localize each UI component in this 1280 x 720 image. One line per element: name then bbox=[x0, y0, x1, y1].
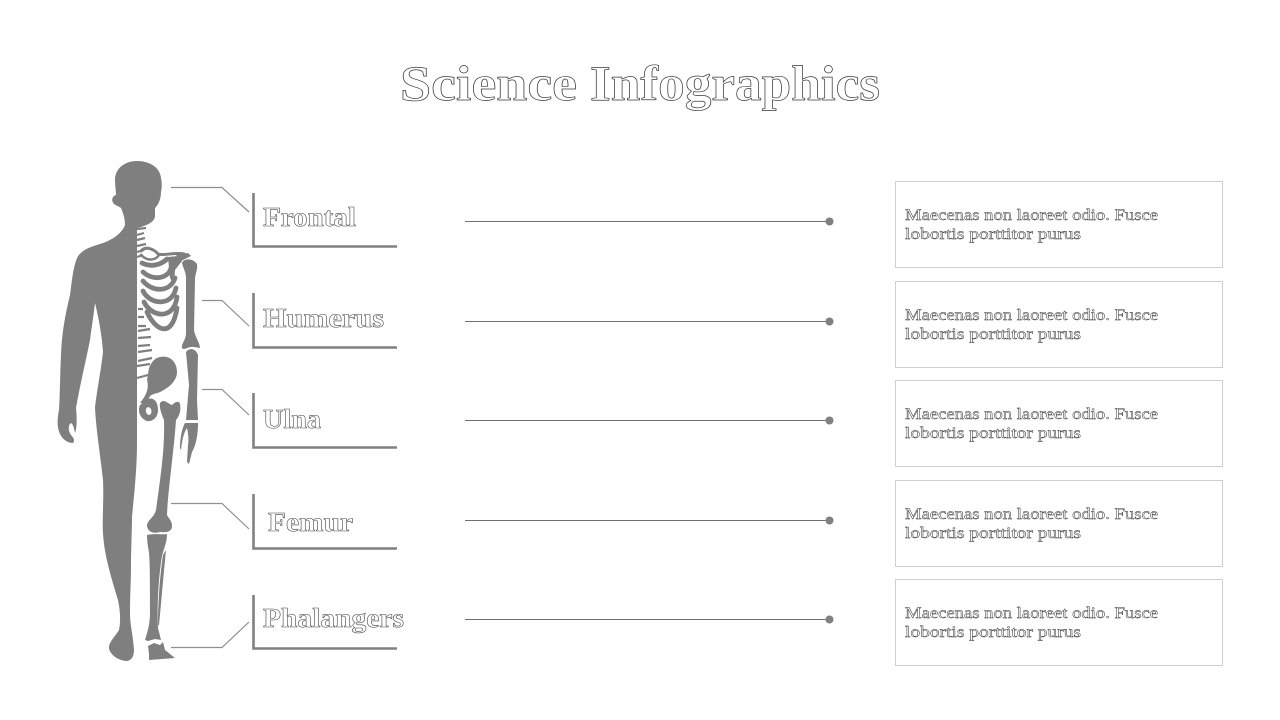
title bbox=[400, 55, 880, 111]
label: Phalangers bbox=[263, 603, 404, 633]
description box bbox=[896, 282, 1222, 368]
row 2: Humerus bbox=[202, 282, 1222, 368]
label bracket bbox=[254, 494, 397, 548]
femur bbox=[147, 401, 180, 533]
connector with dot bbox=[465, 516, 834, 524]
label bracket bbox=[254, 293, 397, 348]
description box: Maecenas non laoreet odio. Fusce bbox=[905, 307, 1158, 324]
leader line bbox=[171, 622, 249, 648]
connector with dot bbox=[465, 318, 834, 326]
connector with dot bbox=[465, 218, 834, 226]
connector with dot bbox=[465, 616, 834, 624]
description box bbox=[896, 480, 1222, 566]
spine bbox=[137, 228, 152, 378]
description box: Maecenas non laoreet odio. Fusce bbox=[905, 207, 1158, 224]
tibia and fibula bbox=[145, 534, 167, 641]
label bracket bbox=[254, 595, 397, 648]
label bracket bbox=[254, 193, 397, 246]
foot bbox=[148, 642, 175, 660]
rib cage bbox=[142, 259, 177, 329]
description box: Maecenas non laoreet odio. Fusce bbox=[905, 506, 1158, 523]
forearm and hand bbox=[180, 349, 198, 464]
collarbone and scapula bbox=[141, 248, 191, 285]
description box bbox=[896, 580, 1222, 666]
description box: lobortis porttitor purus bbox=[905, 624, 1081, 641]
description box: lobortis porttitor purus bbox=[905, 525, 1081, 542]
title: Science bbox=[400, 55, 577, 111]
label bracket bbox=[254, 393, 397, 448]
description box: lobortis porttitor purus bbox=[905, 326, 1081, 343]
leader line bbox=[171, 504, 249, 529]
leader line bbox=[202, 300, 249, 326]
leader line bbox=[202, 390, 249, 415]
row 3: Ulna bbox=[202, 380, 1222, 466]
description box: Maecenas non laoreet odio. Fusce bbox=[905, 406, 1158, 423]
row 1: Frontal bbox=[171, 182, 1222, 268]
label: Frontal bbox=[263, 202, 357, 232]
leader line bbox=[171, 188, 249, 212]
description box: lobortis porttitor purus bbox=[905, 226, 1081, 243]
title: Infographics bbox=[590, 55, 880, 111]
body silhouette left half bbox=[58, 161, 162, 661]
connector with dot bbox=[465, 416, 834, 424]
row 5: Phalangers bbox=[171, 580, 1222, 666]
human body figure bbox=[58, 161, 200, 661]
humerus bbox=[182, 259, 200, 349]
label: Humerus bbox=[263, 303, 384, 333]
description box bbox=[896, 380, 1222, 466]
description box: lobortis porttitor purus bbox=[905, 425, 1081, 442]
description box: Maecenas non laoreet odio. Fusce bbox=[905, 605, 1158, 622]
label: Ulna bbox=[263, 404, 322, 434]
description box bbox=[896, 182, 1222, 268]
label: Femur bbox=[268, 507, 353, 537]
pelvis bbox=[139, 357, 177, 421]
row 4: Femur bbox=[171, 480, 1222, 566]
